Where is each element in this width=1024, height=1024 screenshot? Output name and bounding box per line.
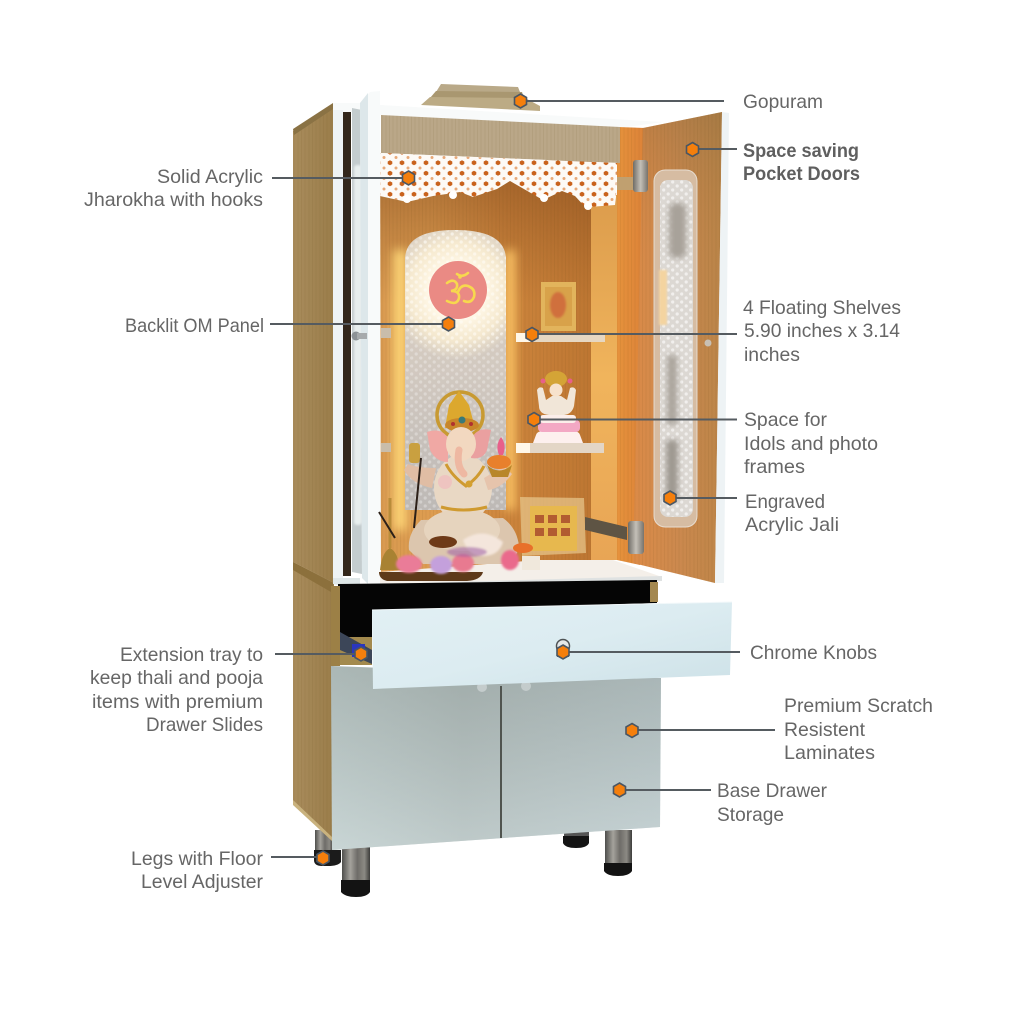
right door	[633, 112, 729, 583]
infographic canvas	[84, 84, 932, 897]
interior right walls	[591, 127, 645, 565]
chrome knob	[556, 640, 570, 657]
callout: Space for Idols: Space for	[744, 409, 828, 431]
ganesha idol	[404, 391, 519, 564]
floor of cabinet	[380, 560, 662, 589]
bell and incense	[379, 498, 400, 570]
callout: Extension tray: Drawer Slides	[146, 714, 263, 736]
lower cabinet doors	[331, 666, 661, 850]
callout: Extension tray: Extension tray to	[120, 644, 263, 666]
callout: Extension tray	[90, 644, 367, 736]
callout: Backlit OM Panel: Backlit OM Panel	[125, 315, 264, 337]
upper side panel	[293, 103, 334, 583]
callout: Base Drawer Storage	[614, 780, 827, 826]
door hinges	[585, 160, 648, 554]
callout: Premium Scratch Resistent Laminates	[626, 695, 933, 764]
backlit OM panel	[405, 230, 506, 510]
callout: Legs with Floor Level Adjuster: Legs with Floor	[131, 848, 263, 870]
lower side panel	[293, 562, 334, 841]
drawer front	[372, 602, 732, 689]
drawer cavity and slide	[331, 580, 658, 666]
callout: 4 Floating Shelves: 4 Floating Shelves	[743, 297, 901, 319]
OM circle	[429, 261, 487, 319]
callout: Space for Idols: Idols and photo	[744, 433, 878, 455]
callout: Gopuram	[514, 91, 823, 113]
callout: Chrome Knobs: Chrome Knobs	[750, 642, 877, 664]
callout: Chrome Knobs	[557, 642, 877, 664]
callout: 4 Floating Shelves: 5.90 inches x 3.14	[744, 320, 900, 342]
callout: Solid Acrylic Jharokha	[84, 166, 414, 211]
callout: Space saving Pocket Doors	[686, 140, 860, 185]
interior back wall	[380, 160, 592, 572]
callout: Gopuram: Gopuram	[743, 91, 823, 113]
callout: Premium Scratch Resistent Laminates: Premium Scratch	[784, 695, 933, 717]
yantra frame	[520, 497, 586, 556]
glow strips	[394, 250, 515, 530]
callout: Space saving Pocket Doors: Pocket Doors	[743, 163, 860, 185]
callout: Engraved Acrylic Jali: Acrylic Jali	[745, 514, 839, 536]
product: pooja cabinet	[293, 84, 732, 897]
gopuram	[421, 84, 540, 111]
jharokha jali	[380, 153, 617, 210]
photo frame on shelf	[541, 282, 576, 331]
callout: Space saving Pocket Doors: Space saving	[743, 140, 859, 162]
callout: Extension tray: items with premium	[92, 691, 263, 713]
callout: Space for Idols	[528, 409, 878, 478]
callout: Space for Idols: frames	[744, 456, 805, 478]
callout: Backlit OM Panel	[125, 315, 454, 337]
acrylic jali window	[654, 170, 697, 527]
callout: Premium Scratch Resistent Laminates: Laminates	[784, 742, 875, 764]
lower shelf	[516, 443, 604, 453]
callout: Solid Acrylic Jharokha: Jharokha with hooks	[84, 189, 263, 211]
pelmet	[381, 115, 620, 163]
callout: Engraved Acrylic Jali	[664, 491, 839, 536]
callout: 4 Floating Shelves	[526, 297, 901, 366]
callout: 4 Floating Shelves: inches	[744, 344, 800, 366]
callout: Legs with Floor Level Adjuster: Level Adjuster	[141, 871, 263, 893]
callout: Engraved Acrylic Jali: Engraved	[745, 491, 825, 513]
flower plate	[379, 533, 540, 581]
top frame and left stile	[333, 103, 663, 590]
callout: Base Drawer Storage: Base Drawer	[717, 780, 827, 802]
callout: Base Drawer Storage: Storage	[717, 804, 784, 826]
callout: Premium Scratch Resistent Laminates: Resistent	[784, 719, 866, 741]
left door	[352, 91, 391, 590]
callout: Legs with Floor Level Adjuster	[131, 848, 329, 893]
upper shelf	[516, 333, 605, 342]
lakshmi idol	[533, 371, 583, 443]
legs	[314, 830, 632, 897]
callout: Solid Acrylic Jharokha: Solid Acrylic	[157, 166, 263, 188]
callout: Extension tray: keep thali and pooja	[90, 667, 263, 689]
